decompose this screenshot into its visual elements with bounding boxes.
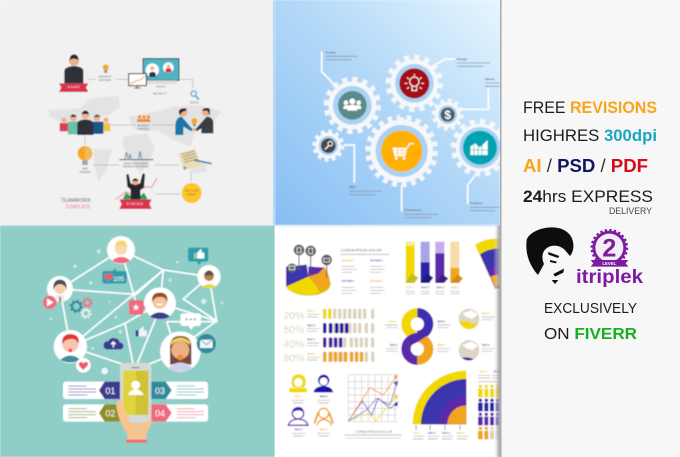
people icons: TEXT 3 [294, 430, 303, 432]
promo text: express: 24hrs EXPRESS [523, 187, 653, 206]
percent rows: TEXT 2 [307, 325, 316, 327]
globes [459, 309, 494, 361]
stacked column bars: TEXT 2 [421, 288, 430, 290]
icon: chat bubble [180, 313, 201, 330]
gear: search [314, 131, 343, 160]
lorem heading and options: OPTION 3 [370, 259, 383, 263]
lorem heading and options [341, 248, 389, 293]
quarter arc chart: TEXT 3 [442, 433, 451, 435]
icon: level 2 badge [591, 230, 628, 267]
option rows: 04 [155, 409, 165, 419]
people pictogram rows: TEXT 1 [479, 372, 488, 374]
icon: star badge [129, 300, 146, 315]
icon: level 2 badge: LEVEL [602, 261, 617, 266]
icon: heart [76, 358, 91, 373]
icon: star badge: ★ [132, 303, 140, 313]
percent rows: TEXT 4 [307, 353, 316, 356]
heading: teamwork template [61, 198, 91, 210]
connector lines [85, 79, 193, 194]
option rows: 02 [105, 409, 115, 419]
heading: teamwork template: TEAMWORK [61, 198, 91, 204]
ring chart labels: TEXT 4 [437, 344, 446, 347]
gear labels: Money [485, 77, 495, 81]
stacked column bars: TEXT 3 [436, 288, 445, 290]
yellow goal circle [182, 183, 202, 203]
icon: small bulb: RESEARCH [99, 76, 112, 79]
icon: mail [197, 334, 216, 353]
figure-eight ring chart [406, 313, 429, 360]
panel: promo sidebar [500, 0, 680, 457]
gear labels: Socials [325, 50, 336, 54]
globes: TEXT 3 [482, 313, 490, 315]
gear: cart [368, 117, 435, 185]
percent rows [284, 310, 373, 365]
icon: large lightbulb: THINKING [79, 172, 91, 174]
yellow goal circle: TARGET [187, 193, 197, 196]
stacked column bars: TEXT 4 [451, 287, 460, 290]
gear: idea [388, 57, 440, 109]
team of people [60, 110, 110, 135]
icon: large lightbulb [78, 146, 92, 174]
icon: small bulb: AND IDEAS [99, 79, 112, 82]
promo text: file formats: AI / PSD / PDF [523, 156, 648, 176]
panel: teamwork template [0, 0, 275, 227]
icon: 105 likes: 105 [113, 276, 124, 283]
percent rows: TEXT 3 [307, 340, 316, 342]
icon: monitors [129, 59, 179, 96]
icon: team meeting: BUSINESS [137, 126, 150, 128]
globes: TEXT 4 [482, 344, 490, 347]
promo text: free revisions: FREE REVISIONS [523, 98, 657, 117]
option rows [63, 382, 208, 422]
world map [48, 96, 222, 182]
person: red haired woman [54, 330, 87, 363]
panel: gears [275, 0, 506, 225]
ring chart labels: TEXT 2 [437, 321, 446, 323]
promo text: exclusively: EXCLUSIVELY [544, 300, 637, 317]
start person [59, 54, 88, 92]
percent rows: 80% [284, 354, 304, 365]
gear labels: SEO [349, 185, 356, 189]
person: dark haired woman [47, 276, 73, 302]
promo text: highres: HIGHRES 300dpi [523, 126, 657, 145]
gear labels: Analysis [470, 201, 483, 205]
brand name: itriplek [576, 267, 643, 288]
lorem heading and options: OPTION 2 [342, 279, 355, 283]
3D pie chart [286, 245, 332, 296]
icon: white star: ★ [199, 296, 208, 307]
person: smiling man [144, 287, 176, 319]
icon: monitors: ONLINE [156, 86, 165, 88]
percent rows: 50% [284, 325, 304, 336]
lorem heading and options: LOREM IPSUM DOLOR [341, 248, 382, 253]
ring chart labels: TEXT 1 [389, 321, 398, 323]
ring chart labels [385, 321, 450, 351]
gear: chart [454, 121, 506, 174]
icon: 105 likes [102, 268, 127, 284]
line chart [344, 374, 402, 438]
icon: cogs [70, 298, 92, 318]
finish person: FINISH [127, 202, 144, 206]
stacked column bars: TEXT 1 [406, 288, 415, 290]
finish person [116, 173, 157, 209]
quarter arc chart [413, 371, 468, 439]
icon: stylised face [526, 227, 573, 284]
stacked column bars [406, 242, 463, 294]
icon: thumbs up bubble [188, 248, 208, 265]
heading: teamwork template: TEMPLATE [65, 204, 91, 210]
gear labels: Ecommerce [405, 208, 422, 212]
quarter arc chart: TEXT 2 [428, 433, 436, 435]
icon: magnifier: DIGITAL [190, 102, 199, 105]
person: blond man [107, 236, 135, 264]
people icons: TEXT 1 [294, 397, 303, 399]
panel: charts [275, 225, 502, 457]
icon: monitors: RELIABILITY [153, 93, 167, 96]
gear labels [325, 50, 500, 218]
phone in hand [116, 363, 153, 443]
yellow goal circle: GOLD YOUR [185, 191, 199, 193]
icon: document and pen [178, 149, 212, 170]
icon: team meeting: STRATEGY [137, 128, 150, 131]
icon: team meeting [137, 115, 150, 131]
lorem heading and options: OPTION 1 [342, 259, 355, 263]
people icons: TEXT 2 [320, 397, 328, 399]
person: man with glasses [197, 265, 221, 288]
promo text: on fiverr: ON FIVERR [544, 326, 637, 343]
people pictogram rows [478, 372, 502, 439]
quarter arc chart: TEXT 1 [413, 433, 422, 435]
percent rows: TEXT 1 [307, 311, 316, 313]
line chart: LOREM IPSUM DOLOR [355, 430, 393, 434]
option rows: 01 [105, 386, 115, 396]
gear: people [326, 79, 378, 131]
icon: large lightbulb: NEW [82, 169, 89, 171]
promo text: delivery: DELIVERY [609, 206, 652, 216]
person: woman with headband [160, 331, 201, 372]
option rows: 03 [155, 386, 165, 396]
icon: play button [43, 296, 56, 309]
people icons: TEXT 4 [320, 429, 328, 432]
gear connector lines [322, 52, 488, 212]
icon: growth bars [119, 151, 153, 169]
network lines [60, 250, 217, 365]
people icons [288, 374, 333, 436]
percent rows: 40% [284, 339, 304, 350]
quarter arc chart: TEXT 4 [457, 432, 465, 435]
lorem heading and options: OPTION 4 [370, 279, 383, 283]
icon: magnifier [190, 91, 199, 105]
3D funnel [475, 238, 500, 288]
people pictogram rows: TEXT 2 [493, 372, 502, 374]
panel: social network [0, 225, 275, 457]
icon: small like [136, 326, 147, 336]
gear labels: Design [457, 57, 467, 61]
icon: level 2 badge: 2 [602, 234, 616, 262]
decorative dots [50, 249, 223, 350]
gear: money [433, 100, 462, 129]
handshake [175, 108, 213, 135]
gear: money: $ [444, 108, 451, 122]
icon: small bulb [99, 64, 112, 82]
percent rows: 20% [284, 311, 304, 322]
icon: cloud [104, 338, 123, 349]
icon: growth bars: GROW YOUR MARKET [123, 163, 149, 166]
ring chart labels: TEXT 3 [390, 345, 398, 347]
start person: START [68, 85, 80, 89]
icon: growth bars: SHARE IN THE MARKET [123, 166, 150, 169]
